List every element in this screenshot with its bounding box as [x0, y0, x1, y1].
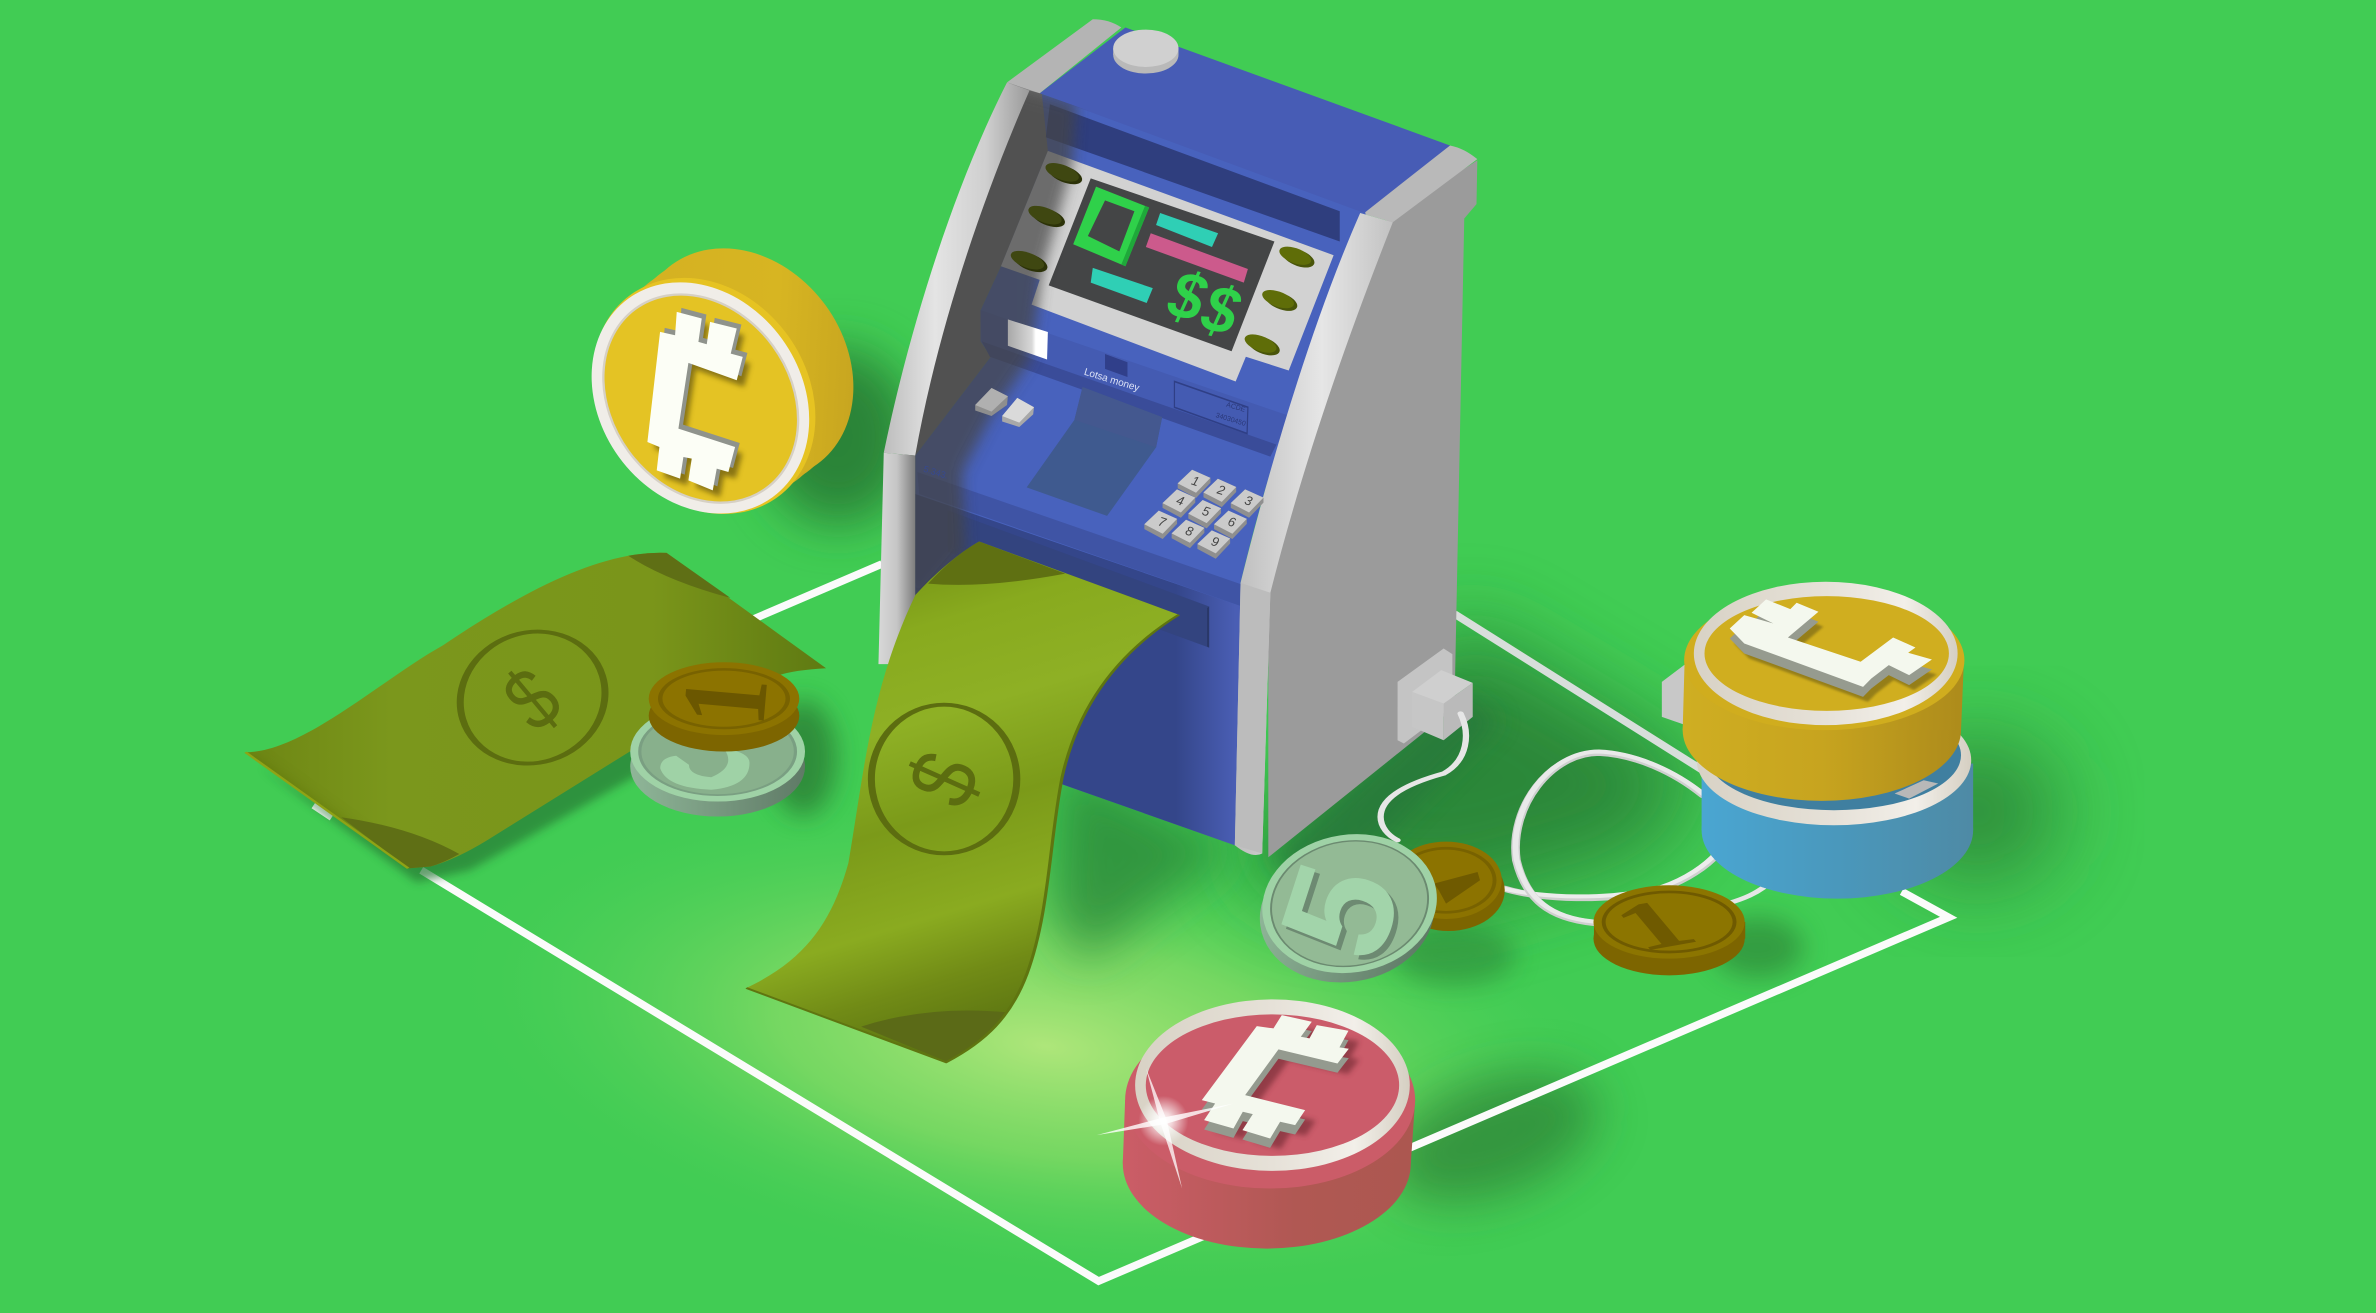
- floor glow: [412, 722, 1680, 1313]
- note seal: [871, 705, 1017, 853]
- screen dollar signs: [1161, 255, 1248, 351]
- screen dollar signs: $: [1161, 255, 1214, 337]
- red coin: [1097, 999, 1415, 1249]
- cast shadows on floor: [762, 349, 2061, 1229]
- top knob: [1113, 30, 1179, 74]
- info box text: ACDE: [1225, 402, 1246, 414]
- left coin stack: [630, 662, 805, 817]
- keypad: 4: [1175, 492, 1186, 509]
- sparkle: [1097, 1068, 1233, 1189]
- keypad: 7: [1156, 514, 1169, 530]
- red coin rim: [1135, 999, 1410, 1171]
- pillar cast shade: [885, 82, 1076, 615]
- screen frame icon: [1073, 187, 1149, 266]
- left bank note: [220, 553, 826, 877]
- right side panel: [1268, 160, 1477, 857]
- keypad: 5: [1200, 503, 1213, 520]
- note corner shading: [928, 541, 1065, 585]
- teal bar lower: [1091, 268, 1153, 303]
- housing strip: [981, 310, 1293, 445]
- blue coin body: [1697, 695, 1973, 899]
- left pillar: [884, 82, 1030, 456]
- coin rim: [547, 234, 861, 558]
- red coin body: [1123, 1078, 1411, 1249]
- machine body: [878, 19, 1477, 857]
- keypad: 9: [1209, 533, 1221, 550]
- five coin small: [630, 702, 805, 817]
- right side buttons: [1243, 243, 1316, 359]
- keypad: 1: [1190, 473, 1201, 489]
- left side buttons: [1009, 159, 1084, 276]
- illustration: isometric cash machine scene: [244, 19, 2096, 1286]
- note corner shading: [628, 553, 730, 598]
- bank note slot: [948, 510, 1209, 648]
- note edge shading: [292, 783, 366, 836]
- cash machine: [878, 19, 1477, 857]
- teal bar: [1156, 213, 1218, 247]
- info box text: [1215, 402, 1246, 428]
- lower ledge: [917, 472, 1242, 606]
- note seal: [452, 629, 613, 766]
- keypad: 6: [1226, 514, 1238, 530]
- red coin symbol: [1202, 1015, 1359, 1149]
- gold coin symbol: [1730, 599, 1937, 702]
- left bank note shadow: [261, 682, 727, 882]
- left wall: [901, 82, 1048, 456]
- shelf number: 5.343.: [922, 464, 949, 481]
- power cable: [1381, 714, 1769, 923]
- header recess: [1046, 104, 1340, 241]
- screen: [1049, 178, 1274, 351]
- top blue: [1040, 27, 1450, 213]
- keypad: 3: [1243, 492, 1255, 509]
- pink bar: [1146, 233, 1248, 283]
- coin numeral five: 5: [1248, 845, 1434, 977]
- right pillar: [1235, 213, 1393, 855]
- brown coin behind five: [1390, 842, 1505, 931]
- coin body: [560, 206, 898, 547]
- left note dollar: $: [485, 649, 579, 750]
- keypad: [1144, 470, 1263, 559]
- plug: [1412, 670, 1473, 740]
- sensor: [1105, 354, 1127, 377]
- keypad: 2: [1215, 481, 1227, 498]
- top left trim: [1007, 19, 1121, 93]
- coin symbol: [647, 308, 750, 497]
- front blue: [915, 93, 1366, 845]
- card slot: [1008, 319, 1048, 359]
- right note dollar: $: [887, 738, 1001, 821]
- floor outline: [314, 564, 1949, 1281]
- info box: [1174, 381, 1248, 434]
- gold coin: [1683, 582, 1964, 801]
- large five coin: [1239, 821, 1458, 995]
- info box text: 34030450: [1215, 412, 1246, 428]
- coin numeral one: 1: [1593, 885, 1714, 965]
- yellow coin: [547, 206, 898, 558]
- screen bezel: [1001, 151, 1334, 381]
- coin numeral five: 5: [1252, 850, 1439, 982]
- one coin small: [649, 662, 799, 752]
- small grey buttons: [975, 388, 1034, 427]
- machine brand text: Lotsa money: [1083, 367, 1141, 394]
- wall socket: [1398, 648, 1452, 744]
- small coin numeral: 1: [655, 670, 794, 731]
- one coin: [1593, 885, 1745, 975]
- grey block behind gold coin: [1662, 662, 1689, 726]
- right bank note: [746, 541, 1179, 1062]
- keypad: 8: [1184, 523, 1196, 539]
- screen dollar signs: $: [1194, 269, 1248, 351]
- tray: [1027, 387, 1162, 516]
- plug, cable and coins on the right: [1239, 582, 1973, 995]
